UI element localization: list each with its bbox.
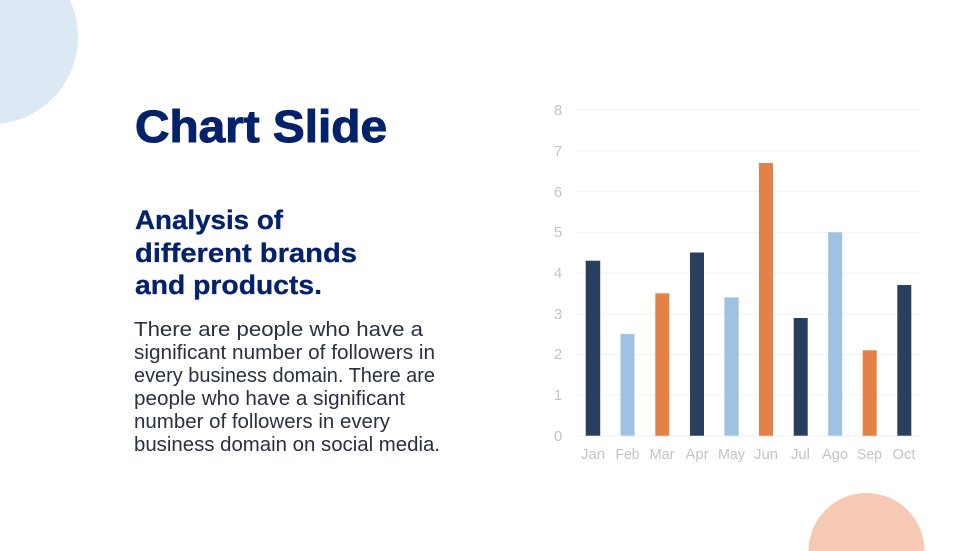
y-axis labels: 1 — [554, 387, 562, 404]
x-axis labels: Ago — [822, 446, 848, 463]
subheading: and products. — [135, 270, 322, 300]
bar chart — [554, 102, 921, 463]
y-axis labels: 8 — [554, 102, 562, 119]
x-axis labels: Feb — [616, 446, 640, 463]
y-axis labels: 4 — [554, 265, 562, 282]
x-axis labels: Jul — [791, 446, 810, 463]
decorative circle: top left — [0, 0, 78, 124]
body text: significant number of followers in — [134, 342, 435, 364]
body text: business domain on social media. — [134, 434, 440, 456]
decorative circle: bottom right — [808, 493, 924, 551]
subheading: different brands — [135, 238, 357, 268]
x-axis labels: Jan — [581, 446, 605, 463]
body text: people who have a significant — [134, 388, 405, 410]
body text: number of followers in every — [134, 411, 390, 433]
body text: There are people who have a — [134, 319, 424, 341]
subheading — [135, 205, 357, 300]
x-axis labels: Oct — [892, 446, 916, 463]
x-axis labels: Jun — [754, 446, 778, 463]
x-axis labels: Sep — [857, 446, 882, 463]
bars — [586, 163, 911, 436]
y-axis labels: 6 — [554, 184, 562, 201]
body text — [134, 319, 440, 456]
x-axis labels — [581, 446, 916, 463]
y-axis labels: 0 — [554, 428, 562, 445]
x-axis labels: Apr — [686, 446, 709, 463]
y-axis labels: 2 — [554, 346, 562, 363]
y-axis labels — [554, 102, 562, 445]
y-axis labels: 7 — [554, 143, 562, 160]
y-axis labels: 5 — [554, 224, 562, 241]
y-axis labels: 3 — [554, 306, 562, 323]
body text: every business domain. There are — [134, 365, 435, 387]
x-axis labels: Mar — [650, 446, 674, 463]
title: Chart Slide — [135, 101, 387, 152]
x-axis labels: May — [718, 446, 745, 463]
subheading: Analysis of — [135, 205, 284, 235]
